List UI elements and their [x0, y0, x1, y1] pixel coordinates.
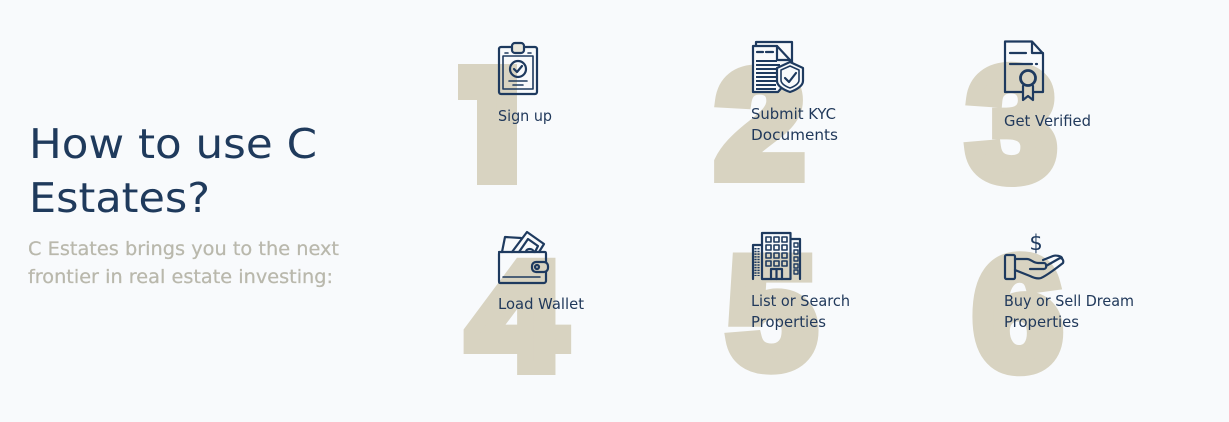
icon: dollar sign: $ [1029, 231, 1043, 255]
step 4: load wallet [469, 232, 584, 401]
number 6: 6 [974, 227, 1062, 401]
icon: open hand [1005, 255, 1063, 279]
number 1: 1 [436, 47, 540, 224]
label: submit KYC documents [751, 105, 838, 144]
title [29, 120, 317, 222]
label: buy or sell dream properties [1004, 292, 1134, 331]
infographic canvas [28, 40, 1133, 376]
step 5: list or search properties [728, 227, 850, 400]
step 1: sign up [458, 42, 552, 185]
subtitle text: frontier in real estate investing: [28, 266, 333, 288]
icon: certificate [1005, 42, 1043, 100]
label: buy or sell dream properties: Properties [1004, 313, 1079, 331]
number 3: 3 [968, 38, 1056, 212]
label: buy or sell dream properties: Buy or Sell Dream [1004, 292, 1134, 310]
icon: document with shield [753, 42, 803, 92]
title: How to use C [29, 120, 317, 168]
title: Estates? [29, 174, 210, 222]
label: get verified: Get Verified [1004, 112, 1091, 130]
label: sign up: Sign up [498, 107, 552, 125]
label: list or search properties [751, 292, 850, 331]
subtitle text: C Estates brings you to the next [28, 238, 339, 260]
label: submit KYC documents: Submit KYC [751, 105, 836, 123]
subtitle text [28, 238, 339, 288]
label: submit KYC documents: Documents [751, 126, 838, 144]
icon: office buildings [753, 233, 800, 279]
icon: wallet with cash [499, 232, 548, 283]
icon: clipboard with check [499, 43, 537, 94]
label: list or search properties: Properties [751, 313, 826, 331]
number 4: 4 [469, 233, 564, 401]
label: load wallet: Load Wallet [498, 295, 584, 313]
icon: hand with dollar [1005, 231, 1063, 279]
step 2: submit KYC documents [716, 40, 838, 208]
step 6: buy or sell dream properties [974, 227, 1134, 401]
step 3: get verified [968, 38, 1091, 212]
number 2: 2 [716, 40, 804, 208]
number 5: 5 [728, 227, 816, 400]
number 1 [458, 64, 517, 185]
label: list or search properties: List or Search [751, 292, 850, 310]
